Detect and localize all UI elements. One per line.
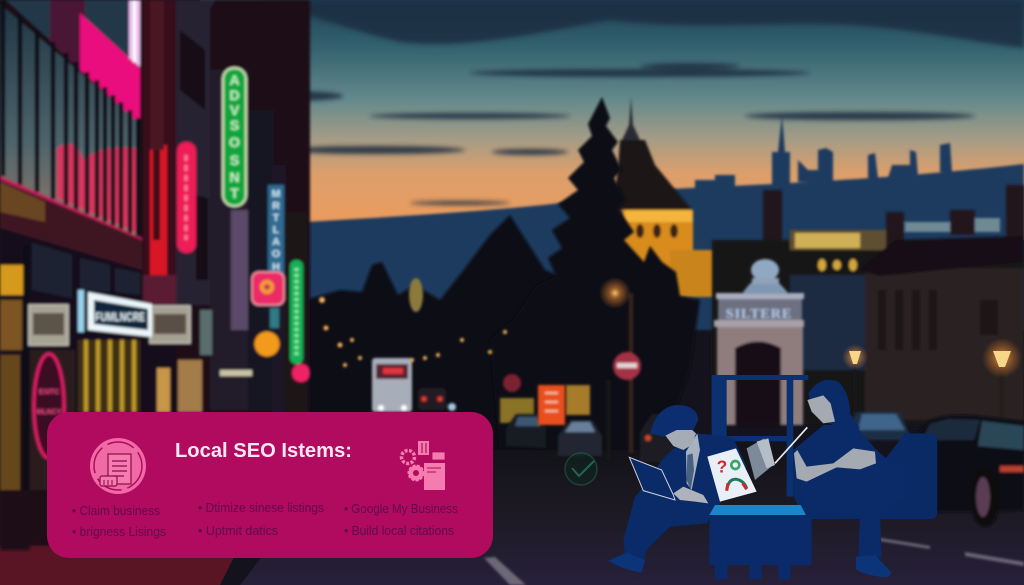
list column 2: • Dtimize sinese listings: [198, 501, 324, 515]
woman: torso and legs: [793, 425, 903, 560]
bench back frame: [712, 375, 808, 497]
table with light-blue top: [709, 505, 812, 579]
background: stone pillar with sign: SILTERE: [726, 307, 792, 322]
panel: Local SEO items: [47, 412, 493, 558]
reflected pink signs: [57, 144, 140, 234]
storefront pillars and lower facade: [23, 245, 29, 545]
list column 1: [72, 504, 166, 539]
background: left sidewalk: [0, 545, 240, 585]
list column 2: [198, 501, 324, 538]
white neon strip: [129, 0, 140, 67]
man: laptop: [629, 457, 675, 500]
man: white shirt collar and tie: [686, 433, 700, 490]
upper-left dark glass and plum wall: [6, 0, 85, 72]
background: street poles and signs: [503, 293, 1003, 460]
background: road lane markings: [484, 538, 1024, 585]
list column 2: • Uptmit datics: [198, 524, 278, 538]
man: body: [608, 405, 747, 573]
left building block: MLNCY: [37, 409, 62, 416]
background: dark clouds: [247, 0, 1024, 205]
teal small sign: [270, 308, 279, 328]
woman: hair: [808, 380, 860, 428]
pink round lamp: [292, 364, 310, 382]
background: parked cars mid street: [506, 412, 912, 462]
held grey document stack: [747, 438, 773, 480]
icon: business listing document in circle: [90, 438, 146, 494]
green neon vertical sign: V: [230, 102, 240, 118]
woman: stylus line: [775, 427, 807, 463]
background: right-hand buildings: [712, 185, 1024, 425]
green neon vertical sign: N: [229, 169, 240, 185]
background: street bokeh lights: [319, 278, 590, 423]
list column 3: [344, 502, 458, 538]
background: tall fir tree: [490, 97, 700, 455]
man: face: [665, 427, 696, 450]
man: jacket, legs and shoe: [623, 433, 747, 560]
left building block: ESITC: [39, 389, 59, 396]
blue vertical sign: [268, 185, 284, 275]
background: illuminated church with tower: [612, 97, 716, 297]
blue vertical sign: O: [272, 248, 280, 260]
green neon second sign: [290, 260, 303, 364]
background: distant hills and skyline: [305, 115, 1024, 330]
window mullions: [3, 0, 138, 237]
blue vertical sign: R: [272, 200, 280, 212]
list column 3: • Google My Business: [344, 502, 458, 516]
red centre building: [143, 0, 176, 305]
blue vertical sign: T: [273, 212, 280, 224]
green neon vertical sign: A: [229, 72, 240, 88]
pink square icon sign: [252, 272, 284, 305]
list column 1: • Claim business: [72, 504, 160, 518]
question mark card with gauge: ?: [717, 457, 727, 477]
grey building: [176, 0, 216, 305]
blue vertical sign: M: [272, 188, 281, 200]
woman: arm: [794, 448, 876, 482]
lit shop windows: [0, 265, 23, 295]
illustration: two people on a bench: [608, 375, 937, 579]
bench back rail behind documents: [727, 436, 787, 441]
blue vertical sign: H: [272, 261, 280, 273]
background: distant car lights: [418, 388, 456, 411]
list column 1: • brigness Lisings: [72, 525, 166, 539]
framed poster signs: [29, 305, 68, 345]
blue vertical sign: A: [272, 236, 280, 248]
background: stone pillar with sign: [714, 259, 804, 425]
reflective window wall: [0, 4, 140, 238]
green neon vertical sign: [222, 67, 247, 207]
list column 3: • Build local citations: [344, 524, 454, 538]
background: road surface: [240, 450, 1024, 585]
man: hair: [650, 405, 698, 437]
blue vertical sign: L: [273, 224, 280, 236]
dark building backdrop: [0, 0, 310, 545]
magenta neon panel: [80, 13, 140, 124]
green neon vertical sign: S: [230, 117, 239, 133]
background: large parked car at right: [912, 415, 1024, 527]
panel background: [47, 412, 493, 558]
round neon shop sign: [34, 354, 64, 458]
storefront dark level: [0, 228, 176, 412]
background: dusk sky: [200, 0, 1024, 240]
background: glowing street lamps: [599, 277, 1022, 378]
green neon vertical sign: T: [230, 185, 239, 201]
illuminated shop sign: [78, 290, 152, 337]
green neon vertical sign: D: [229, 87, 240, 103]
woman: face: [807, 395, 835, 423]
question mark card with gauge: [707, 448, 757, 502]
illuminated shop sign: FUMLNCRE: [95, 312, 145, 324]
background: green check badge on road: [565, 453, 597, 485]
man: hand and cuff: [673, 487, 708, 503]
woman: body: [793, 380, 903, 577]
green neon vertical sign: S: [230, 152, 239, 168]
left building block: [0, 0, 310, 550]
bench seat and side arm: [793, 433, 937, 519]
title: Local SEO Istems:: [175, 439, 352, 462]
pink vertical sign: [177, 142, 196, 253]
background: mid-distance dark street and trees: [305, 215, 620, 455]
upper glass band: [85, 0, 130, 62]
green neon vertical sign: O: [229, 134, 240, 150]
woman: shoe: [856, 555, 892, 577]
far buildings: [210, 70, 248, 410]
icon: gears and documents: [402, 441, 445, 490]
fascia band: [0, 176, 142, 270]
orange round sign: [254, 332, 280, 356]
background: distant bus: [372, 358, 412, 412]
